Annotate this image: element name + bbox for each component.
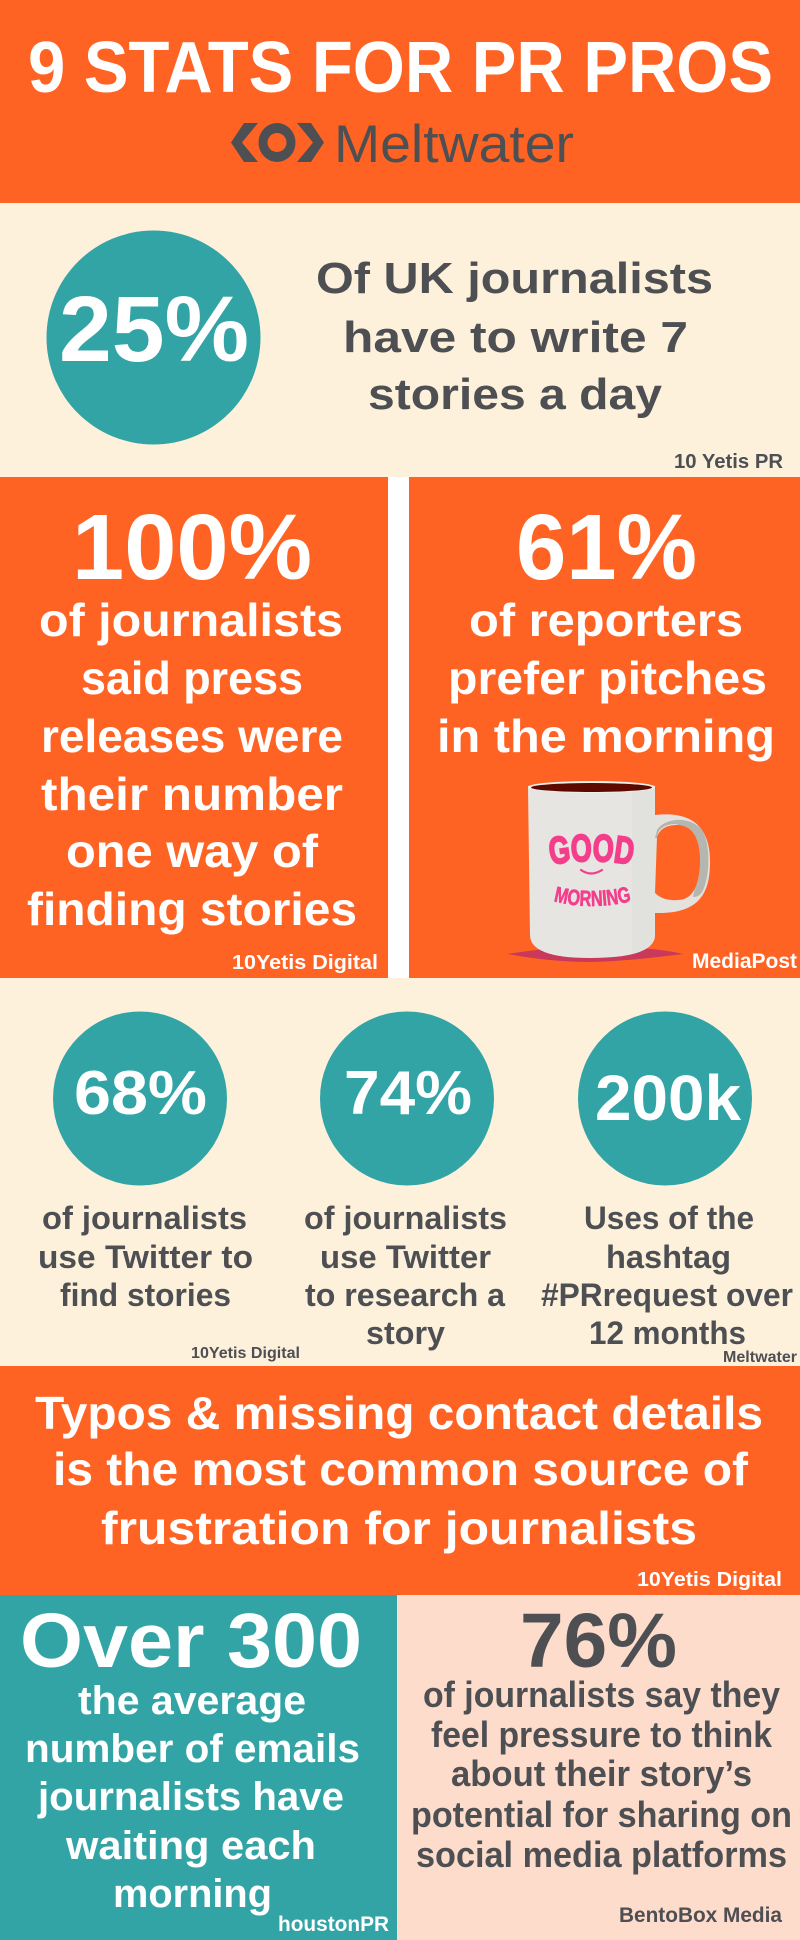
source: 10Yetis Digital: 10Yetis Digital — [191, 1345, 300, 1362]
text: reporters — [437, 594, 775, 762]
text: press releases: finding stories — [27, 883, 357, 935]
text: press releases: of journalists — [39, 594, 343, 646]
text: reporters: of reporters — [469, 594, 743, 646]
text: press releases: one way of — [66, 825, 319, 877]
figure: 100%: 100% — [72, 495, 312, 599]
text: reporters: in the morning — [437, 710, 775, 762]
panel: typos stat — [0, 1366, 800, 1595]
text: typos: Typos & missing contact details — [35, 1387, 763, 1439]
circle: 25%: 25% — [59, 277, 249, 381]
stat: 200k: 12 months — [589, 1315, 746, 1351]
stat: 74%: story — [366, 1315, 445, 1351]
text: emails: number of emails — [25, 1727, 360, 1771]
text: typos: is the most common source of — [53, 1443, 749, 1495]
stat: 74%: use Twitter — [320, 1239, 491, 1275]
text: emails: journalists have — [37, 1775, 344, 1819]
mug text: MORNING: MORNING — [554, 886, 630, 906]
panel: Twitter and hashtag stats — [0, 978, 800, 1366]
stat: 200k: Uses of the — [584, 1200, 754, 1236]
figure: 61%: 61% — [516, 495, 697, 599]
mug text: GOOD: GOOD — [549, 834, 634, 864]
source: BentoBox Media: BentoBox Media — [619, 1904, 782, 1927]
panel: over 300 emails — [0, 1595, 397, 1940]
text: emails: morning — [113, 1872, 272, 1916]
source: Meltwater: Meltwater — [723, 1349, 797, 1366]
text: UK journalists: have to write 7 — [343, 313, 688, 362]
mug text: GOOD — [549, 834, 634, 864]
text: social sharing pressure: feel pressure to think — [431, 1714, 773, 1755]
source: 10Yetis Digital: 10Yetis Digital — [637, 1569, 782, 1591]
text: emails: the average — [78, 1679, 306, 1723]
text: UK journalists — [316, 254, 713, 419]
text: UK journalists: Of UK journalists — [316, 254, 713, 303]
stat: 68%: 68% — [74, 1059, 207, 1128]
panel: 61 percent stat — [409, 477, 800, 978]
mug text: MORNING — [554, 886, 630, 906]
text: typos — [35, 1387, 763, 1554]
figure: 76%: 76% — [520, 1598, 677, 1684]
stat: 74% — [304, 1012, 507, 1351]
panel: header — [0, 0, 800, 203]
stat: 68%: find stories — [60, 1277, 231, 1313]
stat: 200k: #PRrequest over — [541, 1277, 793, 1313]
logo: Meltwater — [231, 115, 574, 174]
text: press releases — [27, 594, 357, 935]
text: social sharing pressure: about their story’s — [451, 1753, 752, 1794]
source: houstonPR: houstonPR — [278, 1913, 389, 1936]
stat: 68%: use Twitter to — [38, 1239, 253, 1275]
text: emails: waiting each — [65, 1824, 316, 1868]
icon: coffee mug — [508, 781, 710, 962]
stat: 74%: 74% — [344, 1059, 472, 1128]
source: MediaPost: MediaPost — [692, 950, 797, 973]
stat: 200k — [541, 1012, 793, 1351]
stat: 74%: of journalists — [304, 1200, 507, 1236]
text: press releases: their number — [41, 768, 343, 820]
text: emails — [25, 1679, 360, 1916]
panel: 25 percent stat — [0, 203, 800, 477]
text: social sharing pressure: of journalists say they — [423, 1674, 780, 1715]
stat: 200k: hashtag — [606, 1239, 731, 1275]
panel: 76 percent stat — [397, 1595, 800, 1940]
text: typos: frustration for journalists — [101, 1502, 697, 1554]
text: press releases: releases were — [41, 710, 343, 762]
text: social sharing pressure — [411, 1674, 792, 1875]
stat: 200k: 200k — [595, 1062, 741, 1134]
panel: 100 percent stat — [0, 477, 388, 978]
figure: Over 300: Over 300 — [20, 1598, 362, 1684]
stat: 68%: of journalists — [42, 1200, 247, 1236]
stat: 74%: to research a — [305, 1277, 505, 1313]
mug smile — [581, 870, 602, 874]
source: 10 Yetis PR: 10 Yetis PR — [674, 451, 784, 473]
text: reporters: prefer pitches — [448, 652, 767, 704]
logo: Meltwater: Meltwater — [334, 115, 574, 174]
circle: 25% — [46, 230, 260, 444]
text: press releases: said press — [81, 652, 303, 704]
text: social sharing pressure: social media platforms — [416, 1834, 787, 1875]
text: UK journalists: stories a day — [368, 370, 663, 419]
source: 10Yetis Digital: 10Yetis Digital — [232, 952, 378, 974]
stat: 68% — [38, 1012, 253, 1313]
